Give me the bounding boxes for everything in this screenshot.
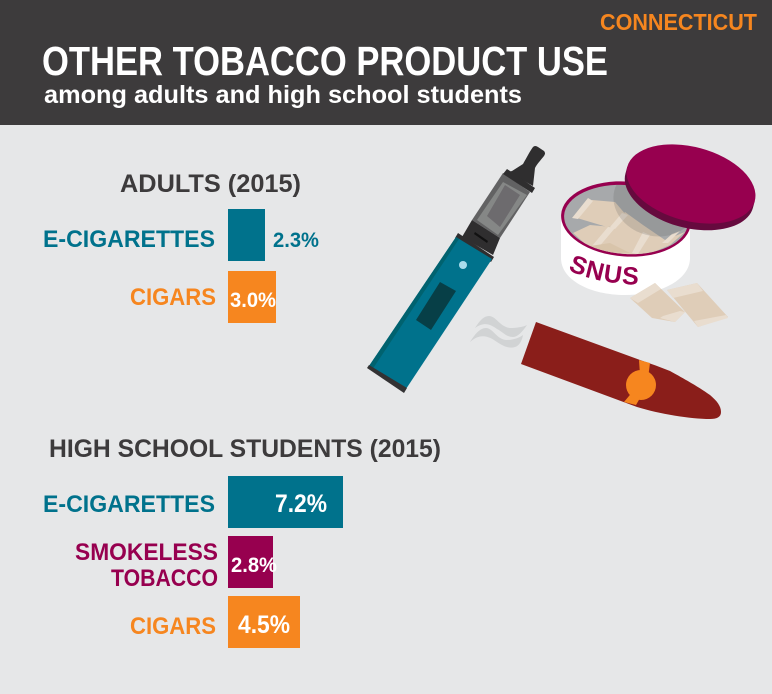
loose pouches: [630, 283, 728, 327]
lid shadow on tin: [614, 185, 685, 236]
label: adults e-cigarettes: E-CIGARETTES: [43, 226, 215, 253]
pouches inside tin: [572, 185, 685, 254]
label: students smokeless tobacco: SMOKELESS: [75, 539, 218, 566]
bar: students smokeless tobacco: [228, 536, 273, 588]
title: OTHER TOBACCO PRODUCT USE: [42, 38, 608, 84]
panel: adults chart: [43, 170, 319, 323]
bar: adults cigars: [228, 271, 276, 323]
header band: [0, 0, 772, 125]
heading: high school students: HIGH SCHOOL STUDENTS (2015): [49, 435, 441, 463]
label: adults cigars: CIGARS: [130, 284, 216, 311]
value: adults cigars: 3.0%: [230, 289, 276, 312]
icon: snus tin: [561, 144, 756, 327]
value: adults e-cigarettes: 2.3%: [273, 229, 319, 252]
heading: adults: ADULTS (2015): [120, 170, 301, 198]
state label: CONNECTICUT: [600, 9, 758, 35]
lid: [616, 131, 764, 244]
label: students e-cigarettes: E-CIGARETTES: [43, 491, 215, 518]
value: students cigars: 4.5%: [238, 611, 290, 639]
icon: smoke: [470, 316, 527, 348]
label: students smokeless tobacco: TOBACCO: [111, 565, 218, 592]
tin label: SNUS: [570, 256, 638, 285]
label: students smokeless tobacco: [75, 539, 218, 592]
subtitle: among adults and high school students: [44, 81, 522, 109]
icon: e-cigarette: [367, 146, 545, 393]
panel: high school students chart: [43, 435, 441, 648]
bar: students cigars: [228, 596, 300, 648]
cigar band: [624, 360, 656, 405]
bar: students e-cigarettes: [228, 476, 343, 528]
value: students e-cigarettes: 7.2%: [275, 490, 327, 518]
bar: adults e-cigarettes: [228, 209, 265, 261]
icon: cigar: [521, 322, 721, 419]
label: students cigars: CIGARS: [130, 613, 216, 640]
value: students smokeless tobacco: 2.8%: [231, 554, 277, 577]
